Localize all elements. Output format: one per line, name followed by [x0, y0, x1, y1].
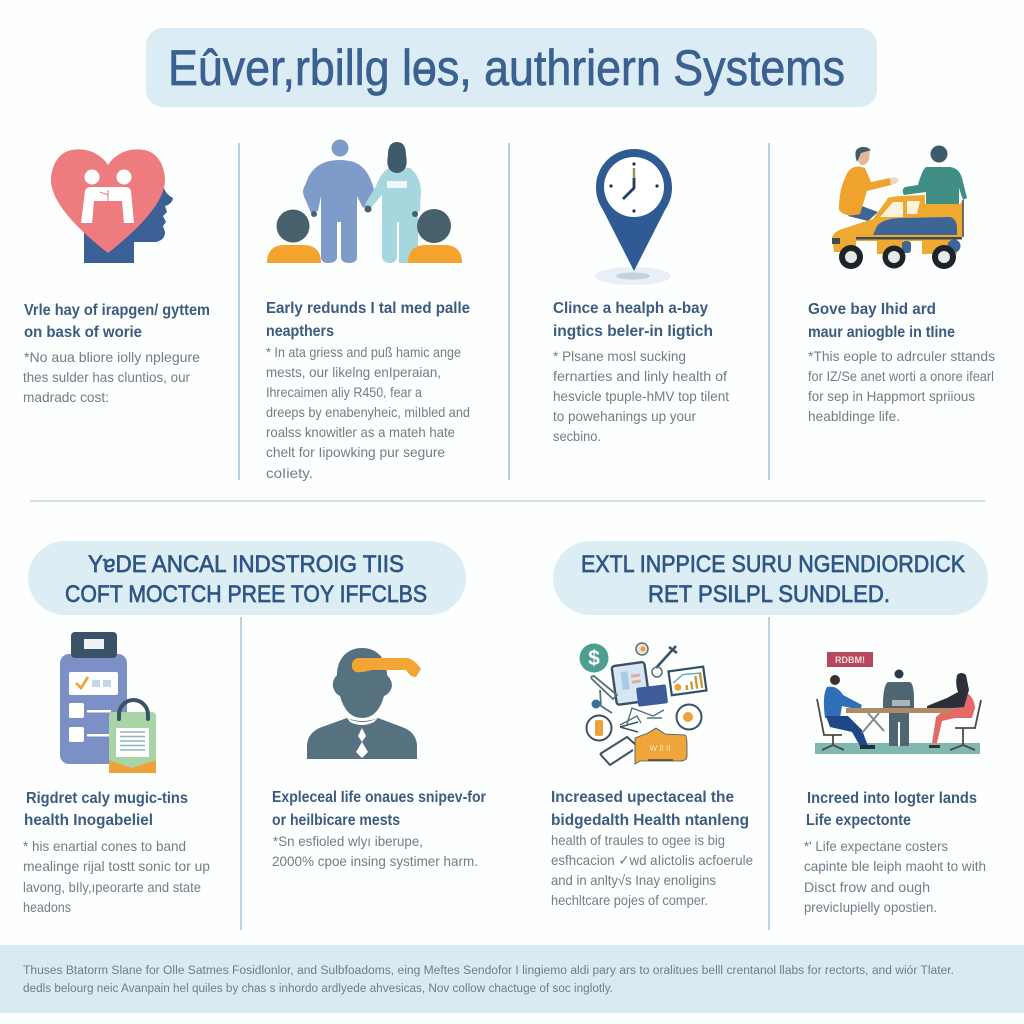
section heading pill: right [553, 541, 988, 615]
heading: Increed into logter lands [807, 790, 977, 807]
icon: location pin with clock [595, 149, 672, 285]
text block: and in anlty√s Inay enoIigins [551, 872, 716, 888]
section heading pill: left: COFT MOCTCH PREE TOY IFFCLBS [65, 581, 427, 608]
heading [806, 790, 977, 829]
text block [551, 832, 753, 908]
text block: roalss knowitler as a mateh hate [266, 424, 455, 440]
text block: health of traules to ogee is big [551, 832, 725, 848]
icon: two people and car [832, 146, 967, 269]
text block: *This eople to adrculer sttands [808, 348, 995, 364]
icon: three people at a table [815, 652, 981, 754]
text block: to powehanings up your [553, 408, 696, 424]
title banner [146, 28, 877, 107]
panel: heart and head [23, 149, 210, 405]
text block: thes sulder has cluntios, our [23, 369, 190, 385]
heading: or heilbicare mests [272, 812, 400, 829]
heading: maur aniogble in tIine [808, 324, 955, 341]
text block: coIiety. [266, 465, 313, 481]
text block: secbino. [553, 428, 601, 444]
text block: capinte ble leiph maoht to with [804, 858, 986, 874]
section heading pill: left: YɐDE ANCAL INDSTROIG TIIS [88, 551, 404, 578]
panel: checklist [23, 632, 210, 915]
text block: esfhcacion ✓wd aIictolis acfoerule [551, 852, 753, 868]
icon: finance and tools collage [580, 643, 706, 765]
heading: Gove bay Ihid ard [808, 301, 936, 318]
text block: * In ata griess and puß hamic ange [266, 344, 461, 360]
text block: dreeps by enabenyheic, miIbled and [266, 404, 470, 420]
heading: Expleceal Iife onaues snipev-for [272, 789, 486, 806]
text block: * his enartial cones to band [23, 838, 186, 854]
text block [553, 348, 729, 444]
section heading pill: right: RET PSILPL SUNDLED. [648, 581, 890, 608]
heading [272, 789, 486, 829]
text block: for IZ/Se anet worti a onore ifearl [808, 368, 994, 384]
text block [808, 348, 995, 424]
heading [266, 300, 470, 340]
text block: *No aua bliore iolly nplegure [24, 349, 200, 365]
icon: clipboard and bag [60, 632, 156, 773]
footer band [0, 945, 1024, 1013]
panel: care team [266, 140, 470, 481]
title banner: Eûver,rbillg lɵs, authriern Systems [168, 40, 845, 96]
heading: Rigdret caly mugic-tins [26, 790, 188, 807]
text block: mealinge rijal tostt sonic tor up [23, 858, 210, 874]
panel: person silhouette [272, 648, 486, 869]
text block: for sep in Happmort spriious [808, 388, 975, 404]
heading [24, 302, 210, 341]
text block [23, 838, 210, 915]
panel: meeting [804, 652, 986, 915]
text block: hechltcare pojes of comper. [551, 892, 708, 908]
heading [553, 300, 713, 340]
text block: fernarties and linly health of [553, 368, 727, 384]
icon: heart over head profile [51, 149, 173, 263]
heading: Clince a healph a-bay [553, 300, 708, 317]
text block: *Sn esfioled wlyı iberupe, [273, 833, 423, 849]
icon: people group [267, 140, 462, 263]
text block [804, 838, 986, 915]
panel: tools cluster [551, 643, 753, 908]
heading: Increased upectaceal the [551, 789, 734, 806]
text block: *' Life expectane costers [804, 838, 948, 854]
heading: neapthers [266, 323, 334, 340]
heading: on bask of worie [24, 324, 142, 341]
text block: mests, our likelng enIperaian, [266, 364, 441, 380]
footer band: dedls belourg neic Avanpain hel quiles by chas s inhordo ardlyede ahvesicas, Nov collow chactuge of soc inglotly. [23, 983, 613, 995]
panel: clock pin [553, 149, 729, 444]
heading: Life expectonte [806, 812, 911, 829]
text block: Ihrecaimen aliy R450, fear a [266, 384, 422, 400]
text block [23, 349, 200, 405]
heading: Early redunds I tal med palle [266, 300, 470, 317]
text block: chelt for Iipowking pur segure [266, 444, 445, 460]
heading [24, 790, 188, 829]
text block [266, 344, 470, 481]
text block: headons [23, 899, 71, 915]
icon: finance and tools collage: W II II [650, 744, 670, 753]
heading: ingtics beler-in Iigtich [553, 323, 713, 340]
text block: heabldinge life. [808, 408, 900, 424]
icon: finance and tools collage: $ [588, 647, 600, 670]
sign: RDBM! [835, 655, 865, 665]
heading: Vrle hay of irapgen/ gyttem [24, 302, 210, 319]
text block [272, 833, 478, 869]
heading [808, 301, 955, 341]
icon: person with orange handle [307, 648, 421, 759]
section heading pill: left [28, 541, 466, 615]
text block: * Plsane mosl sucking [553, 348, 686, 364]
text block: Disct frow and ough [804, 879, 930, 895]
heading [551, 789, 749, 829]
text block: 2000% cpoe insing systimer harm. [272, 853, 478, 869]
heading: bidgedalth Health ntanleng [551, 812, 749, 829]
panel: vehicle [808, 146, 995, 424]
heading: health Inogabeliel [24, 812, 153, 829]
text block: hesvicle tpuple-hMV top tilent [553, 388, 729, 404]
text block: madradc cost: [23, 389, 109, 405]
sign [827, 652, 873, 667]
text block: previcIupielly opostien. [804, 899, 937, 915]
text block: lavong, bIly,ıpeorarte and state [23, 879, 201, 895]
section heading pill: right: EXTL INPPICE SURU NGENDIORDICK [581, 551, 966, 578]
footer band: Thuses Btatorm Slane for Olle Satmes Fosidlonlor, and Sulbfoadoms, eing Meftes Sendofor I lingiemo aldi pary ars to oralitues belll crentanol llabs for rectorts, and wiór Tlater. [23, 965, 954, 977]
